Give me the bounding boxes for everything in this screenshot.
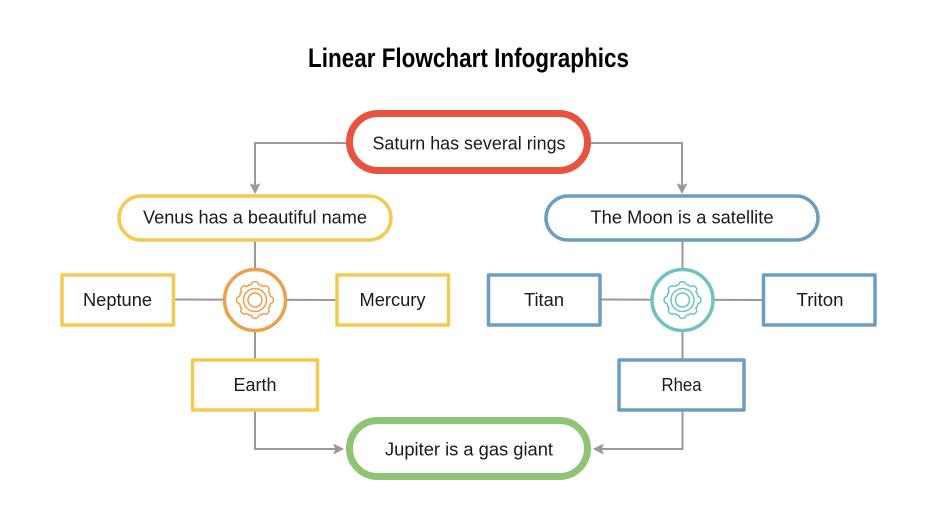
icon: teal gear hub bbox=[652, 270, 713, 330]
node: Venus bbox=[119, 196, 391, 240]
node: Saturn bbox=[350, 114, 588, 170]
arrow: Rhea to Jupiter bbox=[594, 411, 682, 454]
node: Rhea bbox=[619, 360, 744, 410]
node: Titan: Titan bbox=[524, 290, 564, 310]
node: Jupiter: Jupiter is a gas giant bbox=[385, 440, 553, 460]
node: Earth: Earth bbox=[234, 375, 276, 395]
node: Triton: Triton bbox=[796, 290, 844, 310]
arrow: Earth to Jupiter bbox=[255, 411, 343, 454]
connectors: right hub bbox=[601, 241, 763, 359]
title: Linear Flowchart Infographics bbox=[308, 43, 629, 73]
node: Saturn: Saturn has several rings bbox=[372, 134, 566, 154]
node: Neptune: Neptune bbox=[83, 290, 152, 310]
node: Jupiter bbox=[350, 420, 588, 476]
node: Neptune bbox=[62, 275, 174, 325]
arrow: Saturn to Venus bbox=[250, 143, 346, 193]
node: Mercury bbox=[337, 275, 448, 325]
arrow: Saturn to Moon bbox=[591, 143, 686, 193]
connectors: left hub bbox=[174, 241, 336, 359]
node: Venus: Venus has a beautiful name bbox=[143, 208, 367, 228]
icon: orange gear hub bbox=[224, 270, 286, 330]
node: Mercury: Mercury bbox=[360, 290, 426, 310]
node: Titan bbox=[488, 275, 600, 325]
node: Triton bbox=[764, 275, 875, 325]
node: Earth bbox=[192, 360, 318, 410]
node: Moon bbox=[546, 196, 818, 240]
node: Moon: The Moon is a satellite bbox=[590, 208, 774, 228]
node: Rhea: Rhea bbox=[662, 375, 702, 395]
